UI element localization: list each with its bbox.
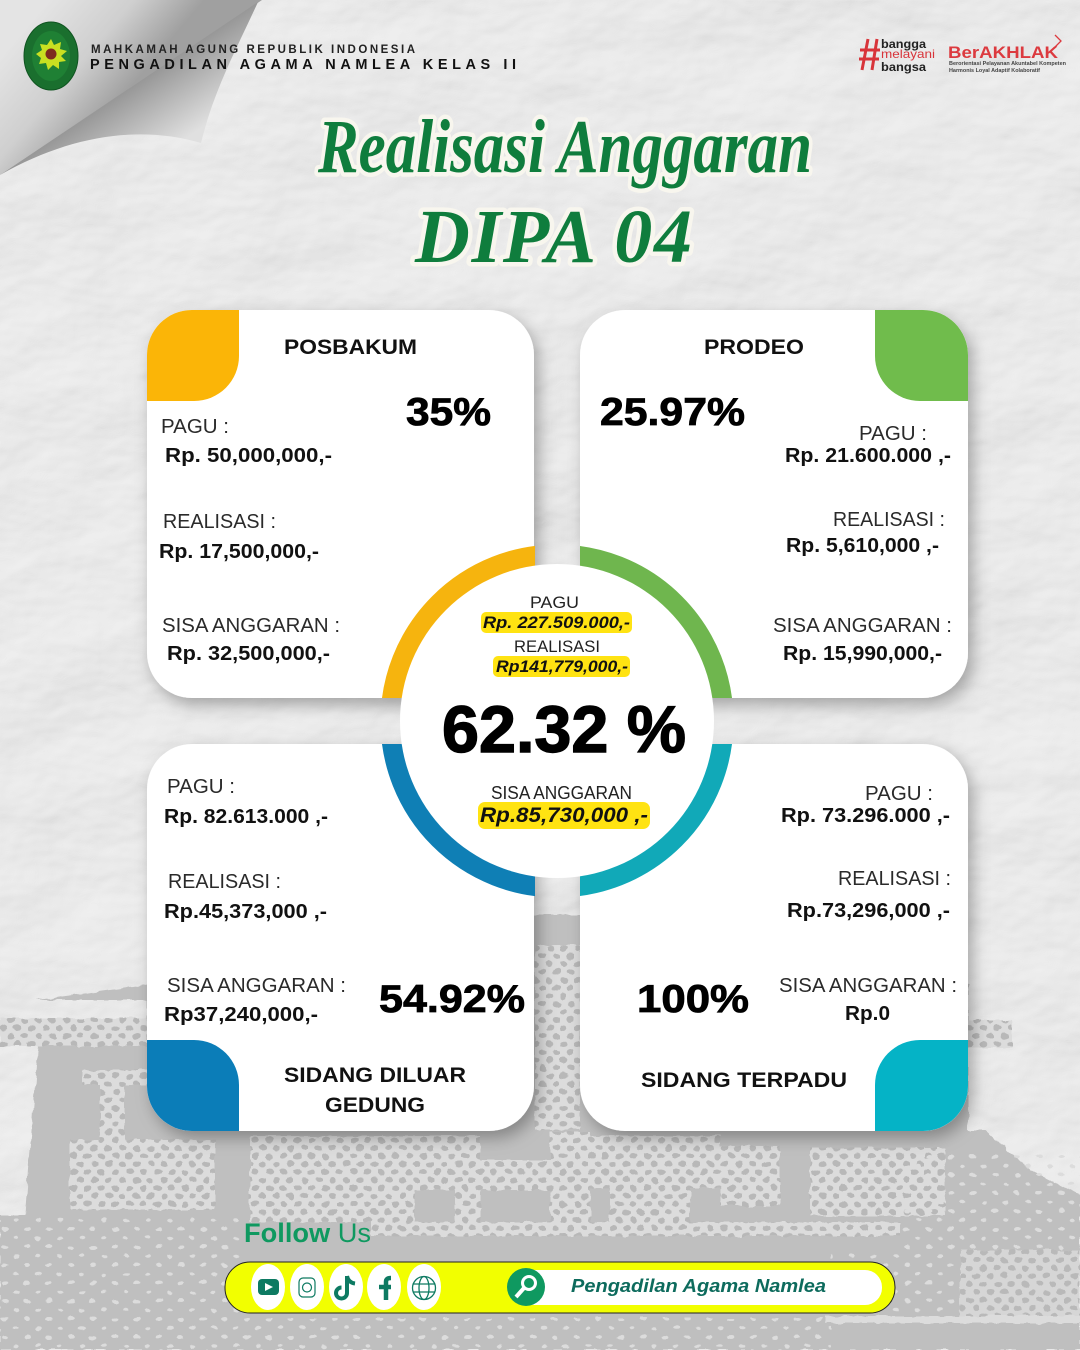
accent corner: PRODEO bbox=[875, 310, 968, 401]
logo: BerAKHLAK: Harmonis Loyal Adaptif Kolaboratif bbox=[949, 68, 1040, 74]
icon: search bbox=[507, 1268, 545, 1306]
panel: POSBAKUM: SISA ANGGARAN : bbox=[162, 615, 340, 637]
panel: POSBAKUM bbox=[147, 310, 534, 698]
header: institution name bbox=[90, 44, 516, 73]
icon: instagram bbox=[299, 1278, 315, 1297]
central summary: REALISASI bbox=[514, 637, 600, 656]
panel: SIDANG TERPADU: SIDANG TERPADU bbox=[641, 1069, 847, 1092]
icon: facebook bbox=[379, 1278, 391, 1300]
accent corner: POSBAKUM bbox=[147, 310, 239, 401]
panel: POSBAKUM: REALISASI : bbox=[163, 511, 276, 533]
social media bar bbox=[225, 1262, 895, 1313]
panel: PRODEO: REALISASI : bbox=[833, 509, 945, 531]
central summary: Rp141,779,000,- bbox=[496, 657, 628, 676]
logo: bangga melayani bangsa: bangga bbox=[881, 37, 926, 51]
panel: SIDANG TERPADU: 100% bbox=[637, 978, 749, 1021]
title bbox=[317, 105, 812, 279]
panel: POSBAKUM: 35% bbox=[406, 391, 491, 434]
panel: SIDANG DILUAR GEDUNG: SIDANG DILUAR bbox=[284, 1064, 466, 1087]
central summary: PAGU bbox=[530, 593, 579, 612]
panel: SIDANG DILUAR GEDUNG: SISA ANGGARAN : bbox=[167, 975, 346, 997]
follow us heading: Follow Us bbox=[244, 1218, 371, 1248]
background: halftone building bbox=[0, 915, 1080, 1350]
panel: SIDANG DILUAR GEDUNG: GEDUNG bbox=[325, 1094, 425, 1117]
panel: SIDANG DILUAR GEDUNG bbox=[147, 744, 534, 1131]
panel: PRODEO: Rp. 15,990,000,- bbox=[783, 643, 942, 665]
page curl bbox=[0, 0, 262, 175]
panel: SIDANG TERPADU: REALISASI : bbox=[838, 868, 951, 890]
panel: SIDANG TERPADU: PAGU : bbox=[865, 783, 933, 805]
title: DIPA 04 bbox=[414, 195, 692, 279]
accent corner: SIDANG TERPADU bbox=[875, 1040, 968, 1131]
panel: PRODEO: Rp. 5,610,000 ,- bbox=[786, 535, 939, 557]
panel: SIDANG DILUAR GEDUNG: 54.92% bbox=[379, 978, 525, 1021]
panel: SIDANG DILUAR GEDUNG: Rp. 82.613.000 ,- bbox=[164, 806, 328, 828]
panel: POSBAKUM: POSBAKUM bbox=[284, 336, 417, 359]
title: Realisasi Anggaran bbox=[317, 105, 812, 189]
panel: SIDANG DILUAR GEDUNG: REALISASI : bbox=[168, 871, 281, 893]
panel: SIDANG DILUAR GEDUNG: PAGU : bbox=[167, 776, 235, 798]
panel: SIDANG TERPADU: Rp. 73.296.000 ,- bbox=[781, 805, 950, 827]
panel: PRODEO: SISA ANGGARAN : bbox=[773, 615, 952, 637]
panel: SIDANG DILUAR GEDUNG: Rp.45,373,000 ,- bbox=[164, 901, 327, 923]
panel: SIDANG TERPADU: Rp.0 bbox=[845, 1003, 890, 1025]
logo: BerAKHLAK: BerAKHLAK bbox=[948, 43, 1059, 62]
icon: youtube bbox=[258, 1279, 279, 1295]
panel: POSBAKUM: PAGU : bbox=[161, 416, 229, 438]
logo: court emblem bbox=[24, 22, 78, 90]
social media bar: Pengadilan Agama Namlea bbox=[571, 1276, 826, 1296]
panel: PRODEO: PAGU : bbox=[859, 423, 927, 445]
central summary: 62.32 % bbox=[442, 692, 686, 766]
panel: POSBAKUM: Rp. 32,500,000,- bbox=[167, 643, 330, 665]
central summary bbox=[400, 564, 714, 878]
central summary: SISA ANGGARAN bbox=[491, 783, 632, 803]
logo: BerAKHLAK bbox=[948, 35, 1067, 74]
panel: POSBAKUM: Rp. 17,500,000,- bbox=[159, 541, 319, 563]
panel: SIDANG TERPADU: Rp.73,296,000 ,- bbox=[787, 900, 950, 922]
ring: four coloured quadrants bbox=[390, 554, 724, 888]
panel: PRODEO: PRODEO bbox=[704, 336, 804, 359]
logo: bangga melayani bangsa: melayani bbox=[881, 47, 935, 61]
panel: PRODEO bbox=[580, 310, 968, 698]
accent corner: SIDANG DILUAR GEDUNG bbox=[147, 1040, 239, 1131]
logo: BerAKHLAK: Berorientasi Pelayanan Akuntabel Kompeten bbox=[949, 61, 1067, 67]
panel: POSBAKUM: Rp. 50,000,000,- bbox=[165, 445, 332, 467]
panel: PRODEO: 25.97% bbox=[600, 391, 745, 434]
icon: tiktok bbox=[336, 1276, 355, 1298]
panel: SIDANG TERPADU bbox=[580, 744, 968, 1131]
icon: globe bbox=[412, 1276, 436, 1300]
central summary: Rp.85,730,000 ,- bbox=[480, 804, 648, 827]
central summary: Rp. 227.509.000,- bbox=[483, 613, 630, 632]
logo: bangga melayani bangsa bbox=[859, 37, 935, 74]
panel: SIDANG DILUAR GEDUNG: Rp37,240,000,- bbox=[164, 1004, 318, 1026]
panel: SIDANG TERPADU: SISA ANGGARAN : bbox=[779, 975, 957, 997]
header: institution name: PENGADILAN AGAMA NAMLEA KELAS II bbox=[90, 57, 516, 73]
panel: PRODEO: Rp. 21.600.000 ,- bbox=[785, 445, 951, 467]
header: institution name: MAHKAMAH AGUNG REPUBLIK INDONESIA bbox=[91, 44, 415, 56]
logo: bangga melayani bangsa: bangsa bbox=[881, 60, 926, 74]
